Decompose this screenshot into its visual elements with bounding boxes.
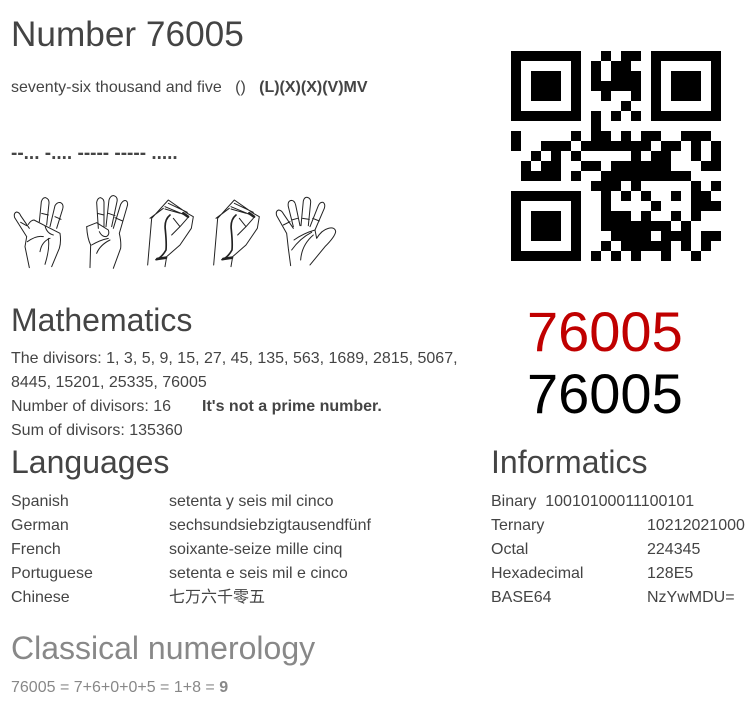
- row: Chinese: [11, 588, 265, 606]
- prime status: It's not a prime number.: [202, 398, 382, 415]
- row: Ternary: 10212021000: [647, 517, 745, 534]
- icon: hand sign 0: [214, 200, 259, 267]
- mathematics text block: [11, 350, 458, 439]
- row: German: [11, 517, 371, 534]
- heading: Languages: Languages: [11, 444, 169, 480]
- row: BASE64: NzYwMDU=: [647, 589, 735, 606]
- row: Spanish: setenta y seis mil cinco: [169, 493, 334, 510]
- icon: hand sign 0: [148, 200, 193, 267]
- divisors list: [11, 350, 458, 391]
- row: Spanish: Spanish: [11, 493, 69, 510]
- row: Hexadecimal: 128E5: [647, 565, 693, 582]
- row: Portuguese: setenta e seis mil e cinco: [169, 565, 348, 582]
- icon: hand sign 7: [14, 198, 63, 268]
- row: German: sechsundsiebzigtausendfünf: [169, 517, 371, 534]
- heading: Mathematics: Mathematics: [11, 302, 192, 338]
- sum of divisors: Sum of divisors: 135360: [11, 422, 183, 439]
- row: Spanish: [11, 493, 334, 510]
- row: Hexadecimal: Hexadecimal: [491, 565, 583, 582]
- row: Octal: Octal: [491, 541, 528, 558]
- row: Octal: 224345: [647, 541, 700, 558]
- row: Octal: [491, 541, 700, 558]
- row: Portuguese: Portuguese: [11, 565, 93, 582]
- informatics table: [491, 493, 745, 606]
- QR code: [511, 51, 721, 261]
- row: German: German: [11, 517, 69, 534]
- title: Number 76005: [11, 15, 244, 54]
- divisors list: 8445, 15201, 25335, 76005: [11, 374, 207, 391]
- heading: Informatics: Informatics: [491, 444, 647, 480]
- icon: hand sign 5: [276, 197, 336, 266]
- morse code: --... -.... ----- ----- .....: [11, 143, 178, 164]
- row: Chinese: Chinese: [11, 589, 70, 606]
- row: Ternary: [491, 517, 745, 534]
- large red number: 76005: [527, 300, 683, 363]
- row: French: soixante-seize mille cinq: [169, 541, 342, 558]
- row: French: [11, 541, 342, 558]
- row: Portuguese: [11, 565, 348, 582]
- row: Ternary: Ternary: [491, 517, 544, 534]
- heading: Classical numerology: Classical numerology: [11, 630, 315, 666]
- number of divisors: Number of divisors: 16: [11, 398, 171, 415]
- divisors list: The divisors: 1, 3, 5, 9, 15, 27, 45, 135, 563, 1689, 2815, 5067,: [11, 350, 458, 367]
- number in words and roman numeral: seventy-six thousand and five () (L)(X)(X)(V)MV: [11, 79, 368, 96]
- row: Binary: Binary 10010100011100101: [491, 493, 694, 510]
- row: French: French: [11, 541, 61, 558]
- sign language hands: [14, 195, 336, 269]
- row: Chinese: 七万六千零五: [169, 589, 265, 606]
- row: BASE64: BASE64: [491, 589, 551, 606]
- numerology calculation: 76005 = 7+6+0+0+5 = 1+8 = 9: [11, 679, 228, 696]
- icon: hand sign 6: [87, 196, 128, 268]
- languages table: [11, 493, 371, 606]
- row: BASE64: [491, 589, 735, 606]
- row: Hexadecimal: [491, 565, 693, 582]
- large black number: 76005: [527, 362, 683, 425]
